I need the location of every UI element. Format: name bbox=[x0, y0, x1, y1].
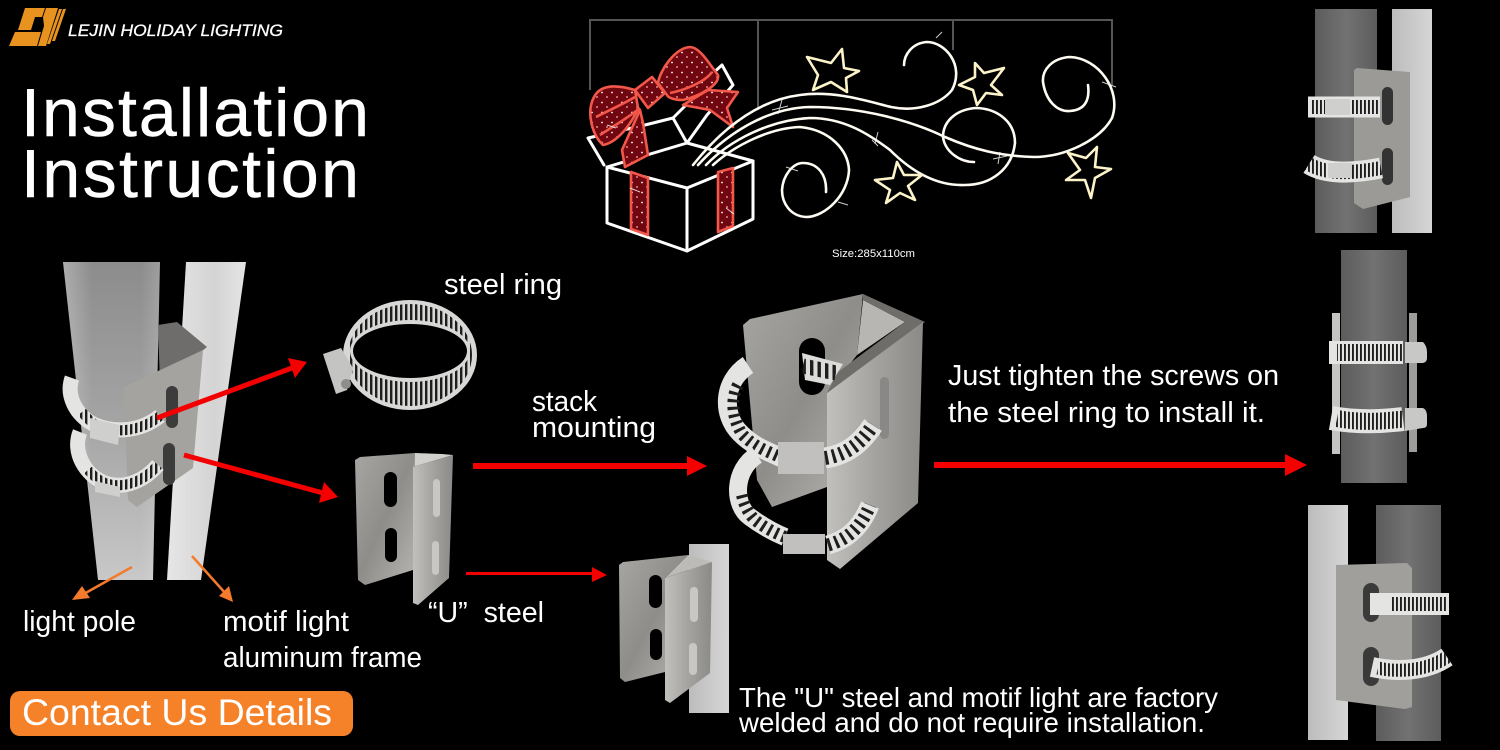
light pole bbox=[63, 262, 160, 580]
frame bbox=[1308, 505, 1348, 740]
tighten screws note bbox=[948, 360, 1279, 429]
size label: Size:285x110cm bbox=[832, 248, 915, 260]
u steel label: “U” steel bbox=[428, 597, 544, 629]
bracket back plate bbox=[743, 294, 863, 507]
sparkles bbox=[607, 32, 1116, 214]
tighten screws note: Just tighten the screws on bbox=[948, 360, 1279, 392]
title bbox=[21, 75, 369, 212]
factory welded note: The "U" steel and motif light are factory bbox=[739, 682, 1218, 713]
factory welded note bbox=[738, 682, 1218, 738]
installed view: side angle bbox=[1329, 250, 1427, 483]
side bars bbox=[1332, 313, 1340, 454]
lower ring bbox=[738, 455, 870, 554]
motif light aluminum frame label: aluminum frame bbox=[223, 642, 422, 674]
motif light aluminum frame label bbox=[223, 606, 422, 674]
bracket top edge bbox=[827, 294, 925, 393]
upper ring bbox=[727, 365, 873, 474]
logo bbox=[9, 8, 283, 46]
title: Installation bbox=[21, 75, 369, 151]
bracket interior bbox=[857, 300, 905, 355]
arrow: stack mounting bbox=[473, 456, 707, 476]
rings bbox=[1370, 604, 1449, 670]
arrow: tighten bbox=[934, 454, 1307, 476]
side slot bbox=[880, 377, 889, 439]
pole bbox=[1376, 505, 1441, 741]
rings bbox=[1329, 341, 1427, 431]
bow bbox=[590, 47, 738, 167]
arrow: welded u steel bbox=[466, 567, 607, 582]
motif light aluminum frame label: motif light bbox=[223, 606, 349, 638]
swoosh lines bbox=[693, 42, 1114, 217]
assembly on pole (left) bbox=[63, 262, 246, 580]
bracket plate bbox=[1354, 68, 1410, 209]
back slot with ring bbox=[799, 338, 843, 395]
logo mark bbox=[9, 8, 66, 46]
steel ring label: steel ring bbox=[444, 269, 562, 301]
light pole label: light pole bbox=[23, 606, 136, 638]
u steel bracket bbox=[124, 322, 207, 507]
upper steel ring bbox=[70, 378, 160, 445]
frame bbox=[1392, 9, 1432, 233]
mounting frame lines bbox=[590, 20, 1112, 110]
title: Instruction bbox=[21, 136, 359, 212]
aluminum frame bbox=[167, 262, 246, 580]
ribbon on box bbox=[631, 168, 733, 235]
steel ring bbox=[323, 300, 477, 410]
tighten screws note: the steel ring to install it. bbox=[948, 397, 1265, 429]
pole bbox=[1315, 9, 1377, 233]
bracket plate bbox=[1336, 563, 1412, 709]
installed view: right angle bbox=[1308, 505, 1449, 741]
stack mounting label bbox=[532, 386, 656, 444]
arrow: pole to steel ring bbox=[157, 358, 307, 418]
u steel bracket bbox=[355, 453, 453, 605]
stacked bracket and rings (center) bbox=[727, 294, 925, 569]
welded u steel on frame bbox=[619, 544, 729, 713]
orange arrow: light pole bbox=[72, 567, 132, 600]
arrow: pole to u steel bbox=[184, 455, 338, 503]
stack mounting label: stack bbox=[532, 386, 597, 418]
stars bbox=[807, 49, 1111, 203]
bracket side plate bbox=[827, 322, 923, 569]
pole bbox=[1341, 250, 1407, 483]
product illustration: gift box motif bbox=[588, 20, 1116, 260]
factory welded note: welded and do not require installation. bbox=[738, 707, 1205, 738]
stack mounting label: mounting bbox=[532, 412, 656, 444]
lower steel ring bbox=[78, 432, 158, 497]
gift box bbox=[588, 65, 753, 251]
logo wordmark: LEJIN HOLIDAY LIGHTING bbox=[68, 21, 283, 40]
contact button: Contact Us Details bbox=[22, 692, 332, 733]
installed view: left angle bbox=[1308, 9, 1432, 233]
orange arrow: frame bbox=[192, 556, 233, 602]
rings bbox=[1308, 99, 1381, 178]
